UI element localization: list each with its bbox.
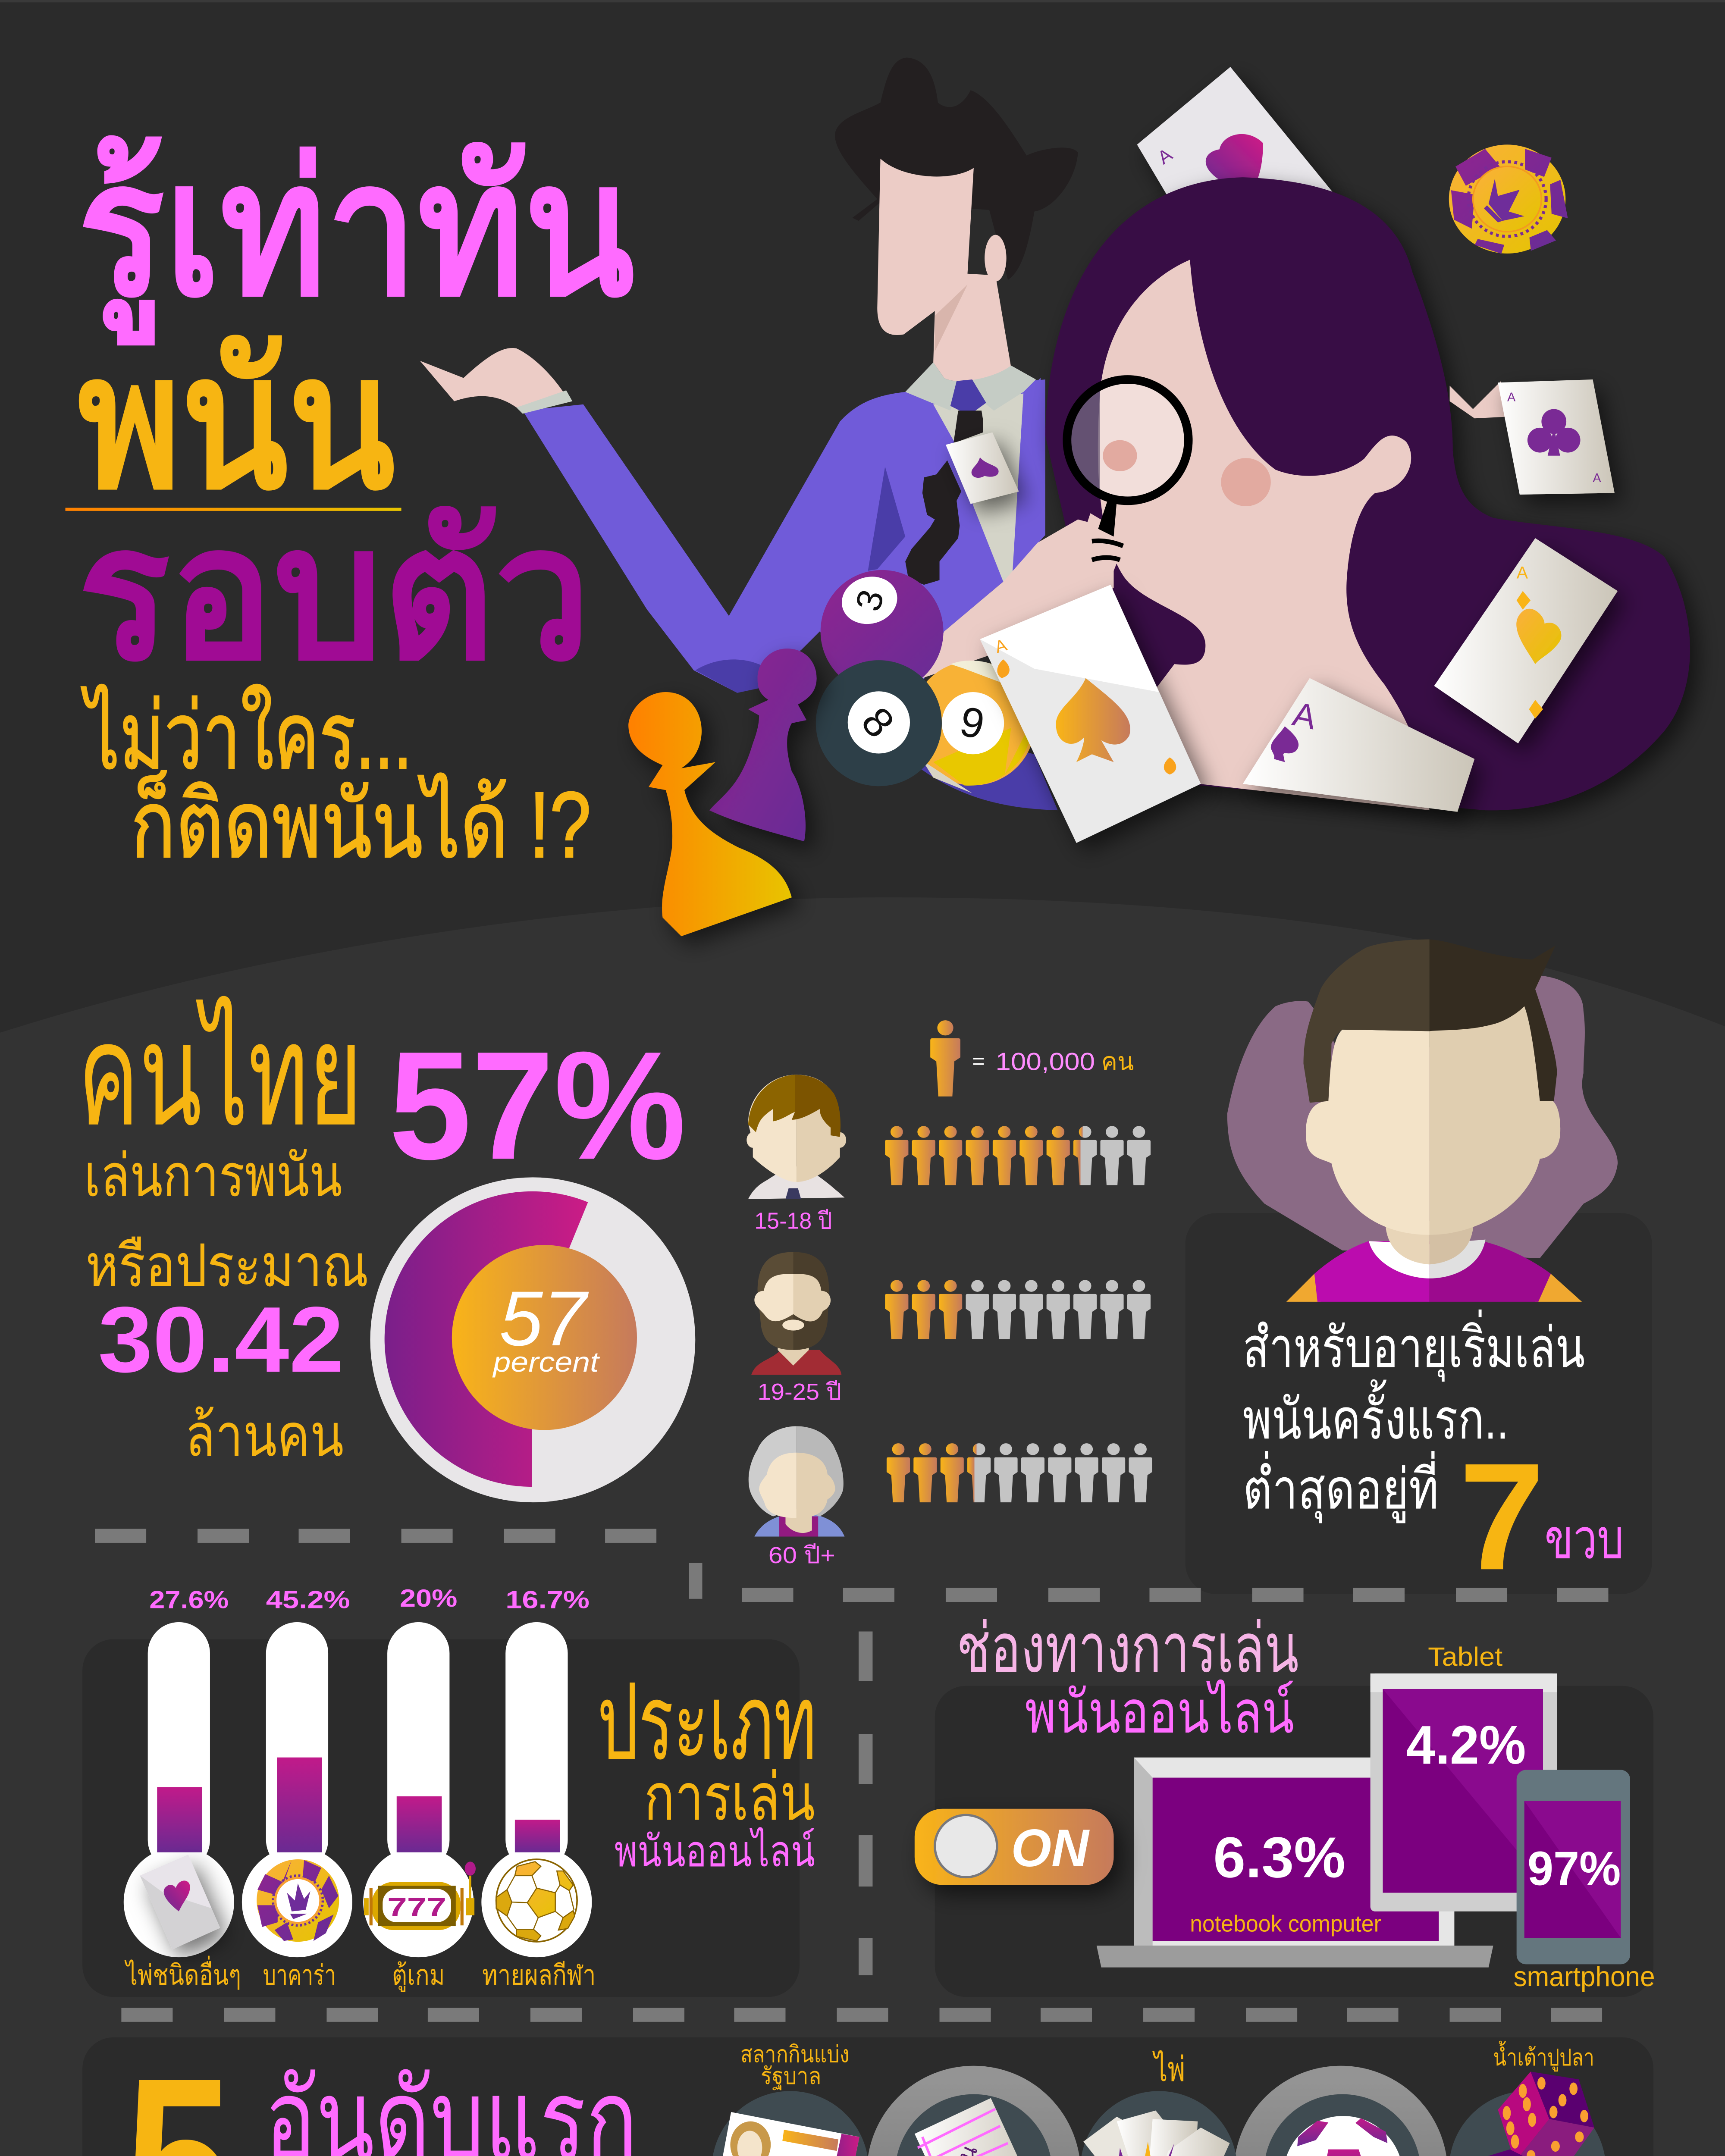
- card behind woman: A: [1154, 144, 1176, 169]
- tube levels: [157, 1758, 560, 1852]
- right heart card: [1434, 538, 1618, 743]
- panel: game types: [82, 1585, 817, 1997]
- icon: football: [1283, 2116, 1403, 2156]
- right heart card: A: [1517, 564, 1528, 583]
- subtitle: ก็ติดพนันได้ !?: [131, 771, 591, 877]
- type labels: ทายผลกีฬา: [482, 1959, 596, 1990]
- panel: top five: [82, 2024, 1653, 2156]
- bottom ace card: [1243, 678, 1474, 812]
- ball 3: 3: [848, 586, 891, 615]
- item labels: รัฐบาล: [761, 2063, 821, 2090]
- magnifying glass: [1067, 379, 1189, 560]
- icon: football: [496, 1859, 577, 1942]
- percentage labels: 27.6%: [149, 1586, 229, 1614]
- avatar: age 15-18: 15-18 ปี: [754, 1208, 832, 1234]
- man hand: [420, 348, 566, 407]
- donut chart 57 percent: [370, 1177, 695, 1502]
- ball 9: [911, 661, 1035, 793]
- pawn purple: [709, 649, 817, 841]
- title line 3: รอบตัว: [78, 489, 591, 698]
- laptop: notebook computer: [1190, 1911, 1381, 1937]
- heading: game types: พนันออนไลน์: [615, 1827, 815, 1876]
- smartphone: 97%: [1527, 1841, 1621, 1895]
- thermometer tubes: [124, 1622, 592, 1957]
- pictogram row 19-25: [885, 1280, 1151, 1339]
- man tie: [950, 379, 986, 415]
- right club card and hand: A: [1593, 471, 1601, 485]
- first play caption: พนันครั้งแรก..: [1243, 1379, 1509, 1451]
- smartphone: [1513, 1770, 1655, 1992]
- right club card and hand: A: [1507, 391, 1516, 404]
- item labels: น้ำเต้าปูปลา: [1493, 2041, 1594, 2071]
- man shirt: [933, 394, 1023, 582]
- subtitle: ไม่ว่าใคร...: [81, 684, 412, 788]
- toggle ON: [915, 1809, 1113, 1885]
- big person avatar: [1227, 940, 1618, 1302]
- icon: baccarat chip: [257, 1859, 339, 1942]
- dashes: [95, 1529, 1608, 2022]
- avatar: age 19-25: [751, 1252, 841, 1405]
- title line 1: รู้เท่าทัน: [78, 125, 635, 346]
- pocket card: [946, 432, 1019, 504]
- poker chip: [1449, 144, 1568, 254]
- ball 9: 9: [956, 697, 988, 748]
- icon: notebook: [915, 2098, 1042, 2156]
- wave ribbon: [698, 2081, 1618, 2156]
- legend: person icon: 100,000: [995, 1048, 1095, 1075]
- percentage labels: 45.2%: [266, 1586, 350, 1614]
- large spade card: A: [993, 635, 1009, 657]
- type labels: [124, 1955, 596, 1992]
- type labels: ไพ่ชนิดอื่นๆ: [124, 1955, 241, 1990]
- laptop: [1097, 1758, 1493, 1968]
- heading: game types: ประเภท: [597, 1663, 817, 1781]
- legend: person icon: =: [972, 1049, 985, 1073]
- smartphone: smartphone: [1513, 1961, 1655, 1992]
- card behind woman: [1137, 67, 1335, 194]
- man neck and face: [877, 159, 1011, 381]
- headline stat: [78, 995, 686, 1469]
- man lapel: [868, 467, 905, 571]
- ball 3: [821, 570, 944, 693]
- item labels: ไพ่: [1152, 2050, 1185, 2088]
- headline stat: คนไทย: [78, 995, 362, 1155]
- headline stat: เล่นการพนัน: [84, 1143, 342, 1209]
- headline stat: หรือประมาณ: [85, 1233, 369, 1299]
- type labels: ตู้เกม: [392, 1959, 445, 1992]
- headline stat: 30.42: [98, 1287, 344, 1391]
- icon: slot machine: 777: [387, 1892, 446, 1922]
- tablet: [1371, 1642, 1557, 1912]
- ball 8: [816, 660, 942, 786]
- subtitle: [81, 684, 591, 877]
- donut chart 57 percent: percent: [492, 1346, 600, 1378]
- item labels: [740, 2041, 1594, 2156]
- ball 8: 8: [853, 698, 903, 746]
- avatar: age 60+: [749, 1426, 845, 1568]
- unit years: ขวบ: [1545, 1507, 1624, 1570]
- first play caption: ต่ำสุดอยู่ที่: [1243, 1451, 1439, 1524]
- number seven: 7: [1459, 1431, 1545, 1601]
- icon: heart card: [140, 1855, 220, 1949]
- woman hair: [1045, 177, 1690, 810]
- avatar: age 19-25: 19-25 ปี: [758, 1379, 841, 1405]
- headline stat: 57%: [389, 1019, 686, 1191]
- panel: online channels: [915, 1610, 1655, 1997]
- title: [66, 125, 635, 877]
- tablet: Tablet: [1428, 1642, 1502, 1671]
- heading: game types: การเล่น: [644, 1761, 815, 1834]
- pictogram row 15-18: [885, 1126, 1151, 1185]
- woman face and chest: [1089, 260, 1430, 810]
- man jacket and arm: [523, 379, 1045, 731]
- heading: channels: ช่องทางการเล่น: [957, 1610, 1299, 1686]
- title line 2: พนัน: [78, 318, 396, 526]
- headline stat: ล้านคน: [185, 1403, 344, 1469]
- cheek: [1221, 458, 1271, 506]
- man hair: [835, 57, 1078, 280]
- first play caption: สำหรับอายุเริ่มเล่น: [1243, 1309, 1585, 1382]
- balls: [816, 570, 1035, 793]
- tablet: 4.2%: [1406, 1714, 1526, 1775]
- item labels: สลากกินแบ่ง: [740, 2042, 849, 2068]
- avatar: age 60+: 60 ปี+: [768, 1542, 835, 1568]
- right club card and hand: [1450, 379, 1615, 495]
- icon: lottery ticket: [717, 2112, 859, 2156]
- title divider: [66, 508, 401, 511]
- avatar: age 15-18: [746, 1075, 846, 1234]
- laptop: 6.3%: [1213, 1825, 1346, 1890]
- icon: dice: [1471, 2071, 1594, 2156]
- illustration: man with cards: [420, 57, 1078, 810]
- first play caption: [1243, 1309, 1585, 1524]
- heading: channels: พนันออนไลน์: [1025, 1680, 1294, 1745]
- icon: slot machine: [364, 1861, 476, 1930]
- heading: channels: [957, 1610, 1299, 1745]
- item circles: [712, 2091, 1606, 2156]
- toggle ON: ON: [1011, 1818, 1090, 1877]
- panel: age of first play: [1185, 940, 1652, 1601]
- bottom ace card: A: [1289, 694, 1320, 736]
- legend: person icon: คน: [1101, 1048, 1134, 1075]
- type labels: บาคาร่า: [263, 1959, 336, 1990]
- woman arm: [922, 520, 1113, 678]
- pawn gold: [628, 692, 792, 936]
- man collar: [905, 362, 1036, 411]
- heading: game types: [597, 1663, 817, 1876]
- percentage labels: [149, 1585, 590, 1614]
- percentage labels: 20%: [400, 1585, 457, 1612]
- pictogram row 60+: [887, 1443, 1152, 1502]
- icon: fan of cards: [1083, 2110, 1230, 2156]
- large spade card: [980, 585, 1201, 843]
- donut chart 57 percent: 57: [499, 1275, 589, 1362]
- percentage labels: 16.7%: [505, 1586, 590, 1614]
- legend: person icon: [930, 1020, 1134, 1097]
- illustration: woman: [922, 177, 1690, 810]
